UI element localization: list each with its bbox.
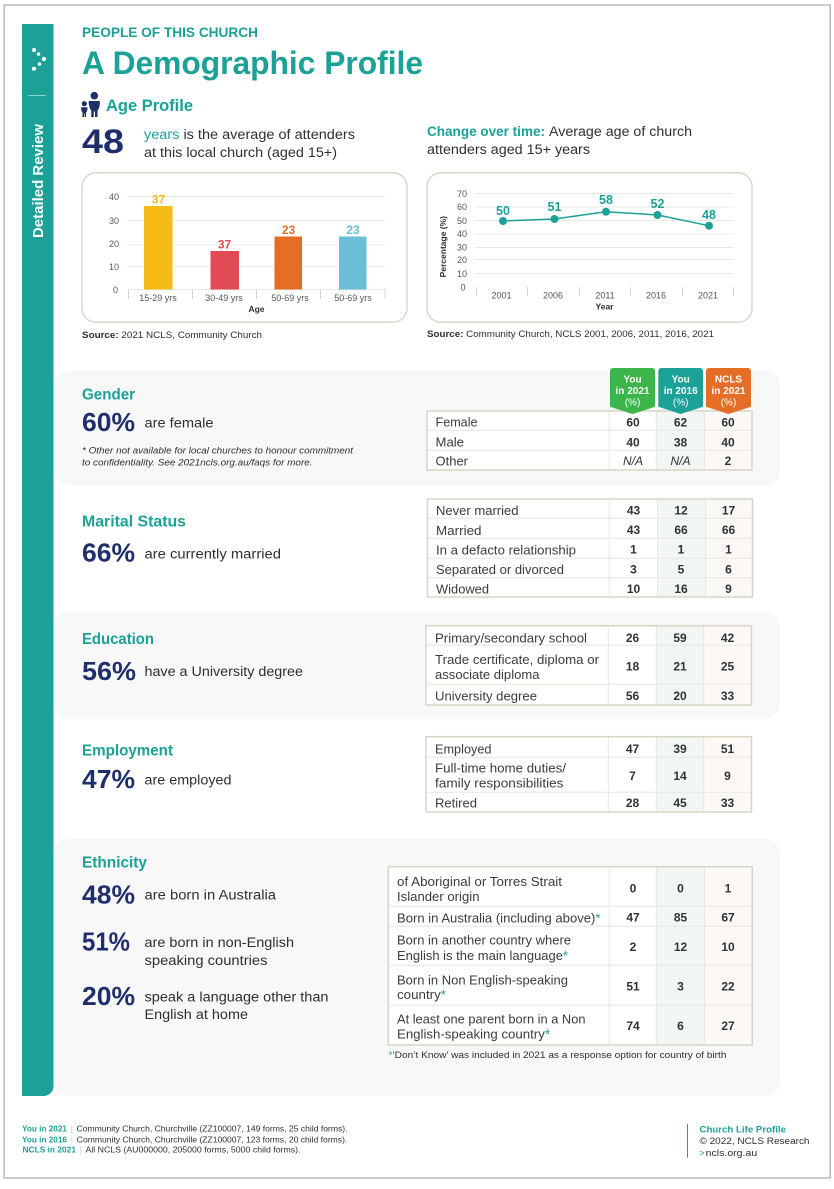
bar: 30-49 yrs [210, 251, 239, 290]
table: marital status: 1 [678, 542, 685, 556]
table: gender: Male [436, 436, 464, 450]
column header: you in 2016: You [672, 375, 690, 386]
footer: publisher block: Church Life Profile [700, 1124, 786, 1135]
bar chart: age profile: 50-69 yrs [334, 293, 372, 303]
table: employment: 39 [673, 742, 687, 756]
heading: age profile: Age Profile [106, 97, 193, 115]
panel: gender background [54, 371, 780, 485]
column header: you in 2021 [610, 368, 655, 414]
column header: you in 2021: You [623, 375, 642, 386]
block: gender summary: to confidentiality. See 2021ncls.org.au/faqs for more. [82, 458, 312, 468]
block: ethnicity summary: speaking countries [144, 953, 268, 968]
footer: publisher block [687, 1124, 810, 1159]
table: marital status: 6 [725, 562, 732, 576]
table: marital status: 43 [627, 523, 640, 537]
block: marital status summary: are currently married [144, 547, 281, 562]
table: employment [426, 737, 752, 812]
sidebar [22, 24, 54, 1096]
icon: sidebar dots logo [32, 48, 46, 71]
footer: survey sources [22, 1125, 348, 1154]
table: employment: family responsibilities [435, 777, 564, 791]
block: gender summary [82, 386, 354, 468]
table: gender: N/A [670, 454, 691, 468]
table: employment: 9 [724, 769, 731, 783]
table: education: 26 [626, 631, 639, 645]
line chart: average age over time: 2016 [646, 290, 666, 300]
table: ethnicity: 10 [721, 940, 735, 954]
line chart: average age over time: 0 [460, 282, 466, 292]
line chart: average age over time: Percentage (%) [438, 216, 448, 277]
bar chart: age profile: 10 [109, 262, 119, 272]
panel: education background [54, 612, 780, 718]
data line [503, 212, 709, 226]
table: education: Primary/secondary school [435, 631, 587, 645]
stat: average age: 48 [82, 123, 124, 161]
data labels: 58 [599, 193, 613, 207]
table: ethnicity: Islander origin [397, 890, 480, 904]
line chart: average age over time: 2006 [543, 290, 563, 300]
table: ethnicity: 27 [721, 1019, 735, 1033]
panel: ethnicity background [54, 839, 780, 1096]
footer: survey sources: Community Church, Churchville (ZZ100007, 149 forms, 25 child forms). [76, 1125, 348, 1134]
table: ethnicity: 2 [630, 940, 637, 954]
table: employment: 51 [721, 742, 734, 756]
table: gender: 40 [721, 435, 735, 449]
table: gender: Other [436, 455, 468, 469]
column header: you in 2016: (%) [673, 398, 688, 409]
bar chart: age profile: 30 [109, 216, 119, 226]
table: gender: N/A [623, 454, 643, 468]
block: ethnicity summary: Ethnicity [82, 854, 147, 871]
footer: publisher block: ncls.org.au [706, 1148, 757, 1159]
table: ethnicity: 1 [725, 882, 732, 896]
table: employment: Retired [435, 797, 477, 811]
table: ethnicity: of Aboriginal or Torres Strait [397, 875, 563, 889]
line chart: average age over time: 20 [457, 255, 467, 265]
table: marital status: 1 [725, 542, 732, 556]
table: employment: 47 [626, 742, 639, 756]
table: education: University degree [435, 690, 537, 704]
table: ethnicity: Born in another country where [397, 934, 571, 948]
block: ethnicity summary: English at home [144, 1007, 248, 1022]
table: marital status [428, 499, 752, 597]
table: education: associate diploma [435, 668, 540, 682]
table: ethnicity: English is the main language * [397, 949, 568, 963]
block: gender summary: Gender [82, 386, 135, 403]
table: marital status: 3 [630, 562, 637, 576]
table: employment: 45 [673, 796, 687, 810]
bar chart: age profile: 20 [109, 239, 119, 249]
footer: survey sources: You in 2016 [22, 1135, 68, 1144]
text: average age description: at this local church (aged 15+) [144, 145, 337, 160]
text: change over time heading: Average age of church [549, 124, 692, 139]
table: marital status: 5 [678, 562, 685, 576]
text: change over time heading [427, 124, 692, 157]
table: ethnicity: country* [397, 988, 446, 1002]
table: education: Trade certificate, diploma or [435, 653, 599, 667]
data labels [496, 193, 716, 222]
table: gender: 60 [721, 416, 735, 430]
footer: survey sources: Community Church, Churchville (ZZ100007, 123 forms, 20 child forms). [77, 1135, 347, 1144]
block: marital status summary: 66% [82, 538, 135, 568]
line chart: average age over time: Year [596, 302, 614, 312]
data points [499, 208, 713, 230]
bar chart: age profile: 0 [113, 285, 118, 295]
table: marital status: Separated or divorced [436, 563, 564, 577]
table: ethnicity: 85 [674, 911, 687, 925]
column header: you in 2021: in 2021 [616, 386, 650, 397]
column header: ncls in 2021: in 2021 [712, 386, 746, 397]
text: change over time heading: attenders aged 15+ years [427, 142, 590, 157]
line chart: average age over time: 2001 [491, 290, 512, 300]
sidebar label: Detailed Review [31, 123, 47, 238]
table: marital status: Married [436, 524, 482, 538]
table: ethnicity: English-speaking country * [397, 1028, 550, 1042]
table: education: 33 [721, 689, 734, 703]
block: gender summary: * Other not available for local churches to honour commitment [82, 445, 354, 455]
table: education: 21 [673, 660, 687, 674]
block: ethnicity summary: are born in non-English [144, 935, 294, 950]
table: gender [427, 411, 752, 470]
block: ethnicity summary: 48% [82, 879, 135, 909]
block: ethnicity summary: are born in Australia [144, 887, 277, 902]
bar chart: age profile: Age [248, 304, 265, 314]
bar chart: age profile: 23 [282, 223, 295, 237]
table: employment: 33 [721, 796, 734, 810]
line chart: average age over time: 40 [457, 229, 467, 239]
table: employment: Full-time home duties/ [435, 762, 567, 776]
icon: parent and child [81, 92, 100, 117]
source: line chart: Source: Community Church, NCLS 2001, 2006, 2011, 2016, 2021 [427, 329, 714, 339]
table: marital status: 43 [627, 504, 640, 518]
data labels: 51 [548, 200, 561, 214]
table: employment: 14 [673, 769, 687, 783]
block: education summary: have a University degree [144, 664, 303, 679]
column header: ncls in 2021: NCLS [715, 375, 742, 386]
table: employment: Employed [435, 742, 492, 756]
bar chart: age profile: 15-29 yrs [139, 293, 177, 303]
table: education: 56 [626, 689, 639, 703]
table: ethnicity: 47 [626, 911, 640, 925]
block: gender summary: are female [144, 415, 214, 430]
line chart: average age over time: 70 [457, 189, 467, 199]
bar chart: age profile: 50-69 yrs [271, 293, 309, 303]
table: ethnicity: 0 [677, 882, 684, 896]
footnote: country of birth: *‘Don’t Know’ was included in 2021 as a response option for country of birth [388, 1050, 726, 1060]
source: age chart: Source: 2021 NCLS, Community Church [82, 330, 262, 340]
table: ethnicity: 74 [626, 1019, 640, 1033]
table: marital status: 17 [722, 504, 735, 518]
line chart: average age over time [427, 173, 752, 322]
column header: you in 2021: (%) [625, 398, 640, 409]
column header: you in 2016 [658, 368, 703, 414]
table: education: 42 [721, 631, 734, 645]
block: education summary: 56% [82, 656, 136, 686]
table: gender: 60 [626, 416, 640, 430]
table: ethnicity: 12 [674, 940, 687, 954]
bar chart: age profile [82, 173, 407, 322]
table: gender: 62 [674, 416, 687, 430]
line chart: average age over time: 10 [457, 269, 467, 279]
column header: ncls in 2021 [706, 368, 751, 414]
block: employment summary [82, 743, 232, 794]
footer: survey sources: NCLS in 2021 [22, 1145, 77, 1154]
table: marital status: Never married [436, 504, 519, 518]
table: marital status: 66 [674, 523, 688, 537]
table: marital status: 9 [725, 582, 732, 596]
table: marital status: In a defacto relationship [436, 543, 576, 557]
bar chart: age profile: 37 [152, 192, 165, 206]
bar chart: age profile: 40 [109, 192, 119, 202]
block: employment summary: are employed [144, 772, 232, 787]
line chart: average age over time: 60 [457, 202, 467, 212]
table: marital status: Widowed [436, 583, 489, 597]
table: employment: 7 [629, 769, 636, 783]
data labels: 50 [496, 204, 510, 218]
table: education: 18 [626, 660, 639, 674]
data labels: 52 [651, 197, 664, 211]
text: average age description [144, 127, 355, 160]
block: employment summary: Employment [82, 743, 173, 760]
table: gender: 40 [626, 435, 640, 449]
table: education: 59 [673, 631, 687, 645]
table: marital status: 66 [722, 523, 735, 537]
block: marital status summary: Marital Status [82, 514, 186, 531]
table: marital status: 16 [674, 582, 688, 596]
table: gender: 38 [674, 435, 687, 449]
bar chart: age profile: 30-49 yrs [205, 293, 243, 303]
block: marital status summary [82, 514, 281, 568]
table: marital status: 10 [627, 582, 640, 596]
table: ethnicity: 6 [677, 1019, 684, 1033]
column header: ncls in 2021: (%) [721, 398, 736, 409]
block: education summary: Education [82, 631, 154, 648]
block: gender summary: 60% [82, 407, 135, 437]
table: ethnicity: 0 [630, 882, 637, 896]
line chart: average age over time: 2011 [595, 290, 615, 300]
text: change over time heading: Change over time: [427, 124, 545, 139]
bar chart: age profile: 23 [346, 223, 360, 237]
line chart: average age over time: 30 [457, 242, 467, 252]
table: gender: Female [436, 416, 478, 430]
bar: 50-69 yrs orange [274, 236, 302, 290]
block: ethnicity summary: speak a language other than [144, 990, 328, 1005]
data labels: 48 [702, 208, 716, 222]
table: marital status: 12 [674, 504, 688, 518]
section label: PEOPLE OF THIS CHURCH [82, 24, 258, 40]
table: ethnicity: 3 [677, 979, 684, 993]
title: A Demographic Profile [82, 45, 423, 81]
table: gender: 2 [725, 454, 732, 468]
column header: you in 2016: in 2016 [664, 386, 698, 397]
table: ethnicity: 51 [626, 979, 640, 993]
table: education [426, 626, 752, 705]
table: ethnicity: Born in Non English-speaking [397, 973, 568, 987]
text: average age description: years is the average of attenders [144, 127, 355, 142]
table: education: 25 [721, 660, 734, 674]
footer: survey sources: You in 2021 [22, 1125, 68, 1134]
block: ethnicity summary: 51% [82, 927, 130, 957]
block: ethnicity summary [82, 854, 328, 1022]
table: ethnicity: 67 [721, 911, 735, 925]
table: ethnicity [388, 867, 752, 1045]
footer: survey sources: All NCLS (AU000000, 205000 forms, 5000 child forms). [86, 1145, 300, 1154]
bar: 50-69 yrs blue [339, 236, 366, 290]
footer: publisher block: > [699, 1148, 705, 1159]
bar: 15-29 yrs [144, 206, 172, 290]
table: employment: 28 [626, 796, 639, 810]
table: ethnicity: Born in Australia (including above) * [397, 912, 601, 926]
block: education summary [82, 631, 303, 686]
footer: publisher block: © 2022, NCLS Research [700, 1136, 810, 1147]
table: marital status: 1 [630, 542, 637, 556]
block: ethnicity summary: 20% [82, 981, 135, 1011]
table: ethnicity: At least one parent born in a Non [397, 1012, 586, 1026]
table: ethnicity: 22 [721, 979, 735, 993]
block: employment summary: 47% [82, 764, 135, 794]
bar chart: age profile: 37 [218, 238, 231, 252]
line chart: average age over time: 50 [457, 216, 467, 226]
line chart: average age over time: 2021 [698, 290, 718, 300]
table: education: 20 [673, 689, 687, 703]
